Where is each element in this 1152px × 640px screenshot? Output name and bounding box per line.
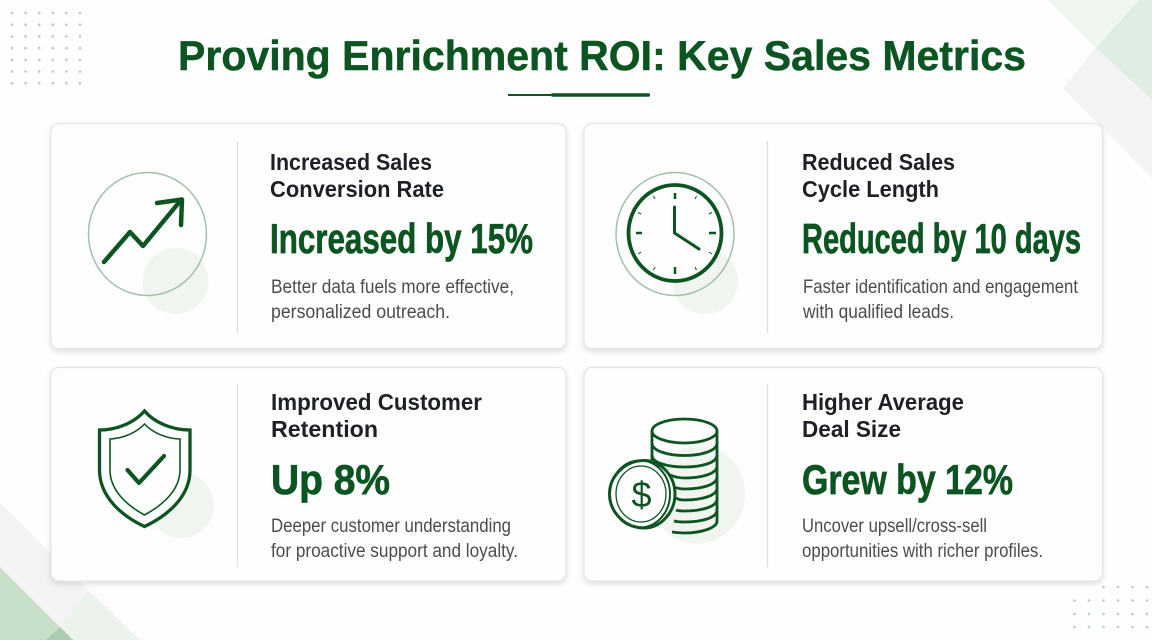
icon: clock	[616, 172, 738, 314]
description: Deeper customer understanding	[271, 516, 511, 537]
panel: customer retention	[51, 368, 566, 581]
panel: sales cycle length	[584, 124, 1102, 348]
title: Proving Enrichment ROI: Key Sales Metrics	[178, 32, 1026, 79]
description: personalized outreach.	[271, 302, 450, 323]
heading: Deal Size	[802, 416, 901, 442]
description: Faster identification and engagement	[803, 277, 1079, 298]
description: for proactive support and loyalty.	[271, 541, 518, 562]
heading: Improved Customer	[271, 389, 482, 415]
title underline	[508, 93, 650, 97]
decoration: bottom right dot grid	[1073, 586, 1148, 628]
description: Uncover upsell/cross-sell	[802, 516, 987, 537]
description: Better data fuels more effective,	[271, 277, 514, 298]
heading: Increased Sales	[270, 149, 432, 175]
heading: Reduced Sales	[802, 149, 955, 175]
description: opportunities with richer profiles.	[802, 541, 1043, 562]
heading: Cycle Length	[802, 176, 939, 202]
icon: coin stack	[610, 419, 759, 557]
decoration: top left dot grid	[11, 12, 81, 84]
metric value: Up 8%	[271, 456, 390, 503]
heading: Retention	[271, 416, 378, 442]
decoration: top right shapes	[1048, 0, 1152, 178]
description: with qualified leads.	[802, 302, 954, 323]
icon: rising trend arrow	[88, 172, 208, 314]
metric value: Increased by 15%	[270, 215, 533, 262]
metric value: Grew by 12%	[802, 456, 1013, 503]
panel: sales conversion rate	[51, 124, 566, 348]
heading: Higher Average	[802, 389, 964, 415]
icon: coin stack: $	[631, 474, 652, 515]
panel: average deal size	[584, 368, 1102, 581]
icon: shield with check	[100, 411, 214, 538]
heading: Conversion Rate	[270, 176, 444, 202]
decoration: bottom left shapes	[0, 503, 140, 640]
